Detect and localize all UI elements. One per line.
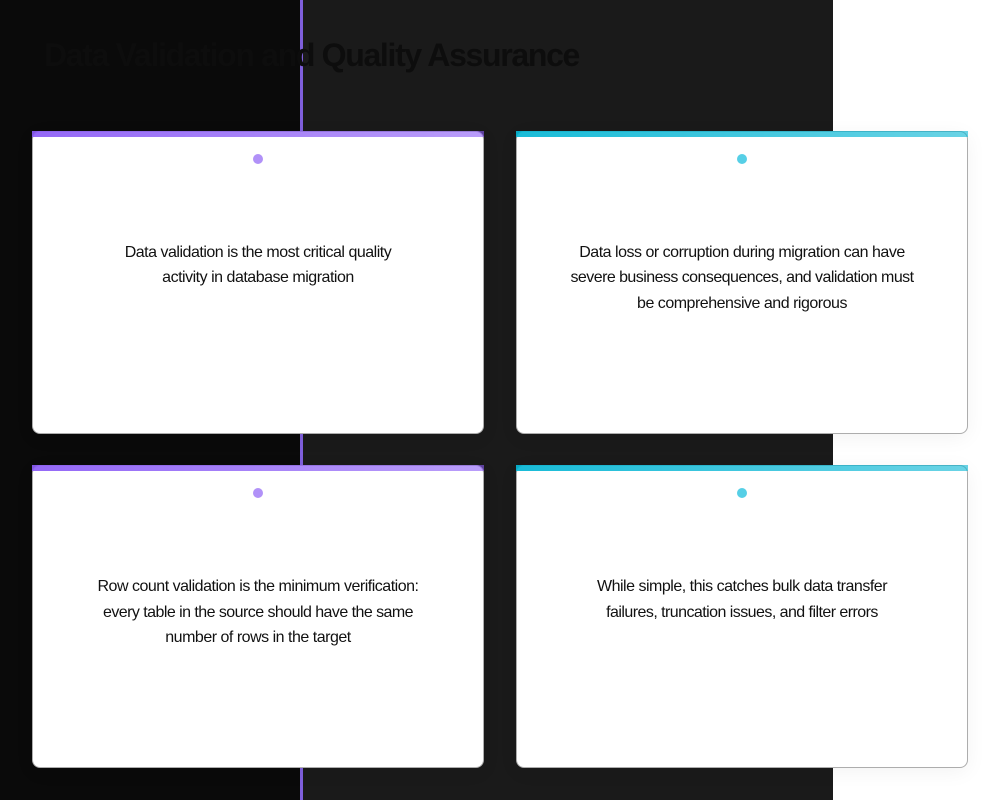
accent bar <box>516 131 968 137</box>
panel: row count validation <box>32 465 484 768</box>
marker dot <box>737 488 747 498</box>
card text <box>125 244 392 286</box>
accent bar <box>32 131 484 137</box>
title: Data Validation and Quality Assurance <box>44 37 579 73</box>
card text <box>570 244 914 312</box>
panel: bulk failure detection <box>516 465 968 768</box>
vertical purple timeline line <box>300 0 303 800</box>
card text: severe business consequences, and validation must <box>570 269 914 286</box>
left dark background panel <box>0 0 300 800</box>
marker dot <box>253 488 263 498</box>
panel: data validation importance <box>32 131 484 434</box>
accent bar <box>516 465 968 471</box>
accent bar <box>32 465 484 471</box>
card text: activity in database migration <box>162 269 354 286</box>
right dark background panel <box>303 0 833 800</box>
card text: Row count validation is the minimum verification: <box>97 578 419 595</box>
card text: every table in the source should have the same <box>103 604 413 621</box>
card text: Data loss or corruption during migration can have <box>579 244 905 261</box>
marker dot <box>253 154 263 164</box>
card text: failures, truncation issues, and filter errors <box>606 604 878 621</box>
marker dot <box>737 154 747 164</box>
card text: number of rows in the target <box>165 629 351 646</box>
card text: be comprehensive and rigorous <box>637 295 847 312</box>
panel: data loss consequences <box>516 131 968 434</box>
card text <box>97 578 419 646</box>
card text: While simple, this catches bulk data transfer <box>597 578 887 595</box>
card text: Data validation is the most critical quality <box>125 244 391 261</box>
card text <box>597 578 888 621</box>
